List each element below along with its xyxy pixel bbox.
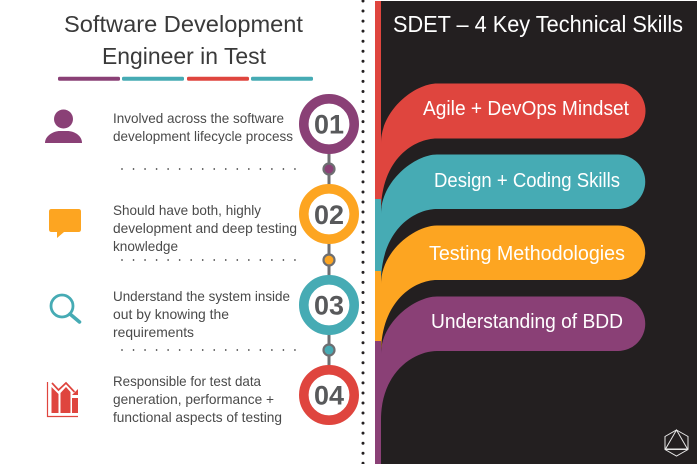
skill: design: Design + Coding Skills (434, 169, 620, 192)
title: Software Development (64, 11, 304, 37)
text: item 3: out by knowing the (113, 306, 229, 322)
text: item 3: requirements (113, 324, 194, 340)
horizontal dotted separators (122, 169, 296, 350)
timeline connector (324, 150, 334, 370)
badge 04 (304, 370, 354, 420)
skill: bdd (375, 296, 645, 464)
badge 02: 02 (314, 200, 344, 230)
badge 04: 04 (314, 380, 344, 410)
text: item 4: Responsible for test data (113, 373, 261, 389)
text: item 3: Understand the system inside (113, 288, 290, 304)
text: item 2: development and deep testing (113, 220, 297, 236)
title underline bars (58, 77, 313, 81)
badge 01 (304, 99, 354, 149)
text: item 2 (113, 202, 297, 254)
text: item 1 (113, 110, 293, 144)
skill: agile (375, 1, 646, 212)
skill: agile: Agile + DevOps Mindset (423, 97, 629, 120)
icon: chat bubble (49, 209, 81, 238)
text: item 2: knowledge (113, 238, 178, 254)
icon: hexagon logo (665, 430, 688, 456)
panel: left white (0, 0, 375, 464)
text: item 1: Involved across the software (113, 110, 284, 126)
skill: design (375, 154, 645, 283)
skill: testing (375, 226, 645, 354)
title: Engineer in Test (102, 43, 267, 69)
icon: magnifier (51, 295, 80, 322)
panel: right dark (375, 1, 697, 464)
badge 03: 03 (314, 290, 344, 320)
badge 03 (304, 280, 354, 330)
text: item 4 (113, 373, 282, 425)
badge 02 (304, 189, 354, 239)
text: item 4: functional aspects of testing (113, 409, 282, 425)
skill: testing: Testing Methodologies (429, 242, 625, 265)
icon: declining chart (48, 382, 78, 416)
vertical dotted divider (362, 1, 364, 464)
icon: person (45, 110, 82, 143)
title (64, 11, 304, 69)
text: item 2: Should have both, highly (113, 202, 261, 218)
heading: SDET – 4 Key Technical Skills (393, 11, 683, 37)
skill: bdd: Understanding of BDD (431, 310, 623, 333)
text: item 3 (113, 288, 290, 340)
badge 01: 01 (314, 110, 344, 140)
text: item 1: development lifecycle process (113, 128, 293, 144)
text: item 4: generation, performance + (113, 391, 274, 407)
